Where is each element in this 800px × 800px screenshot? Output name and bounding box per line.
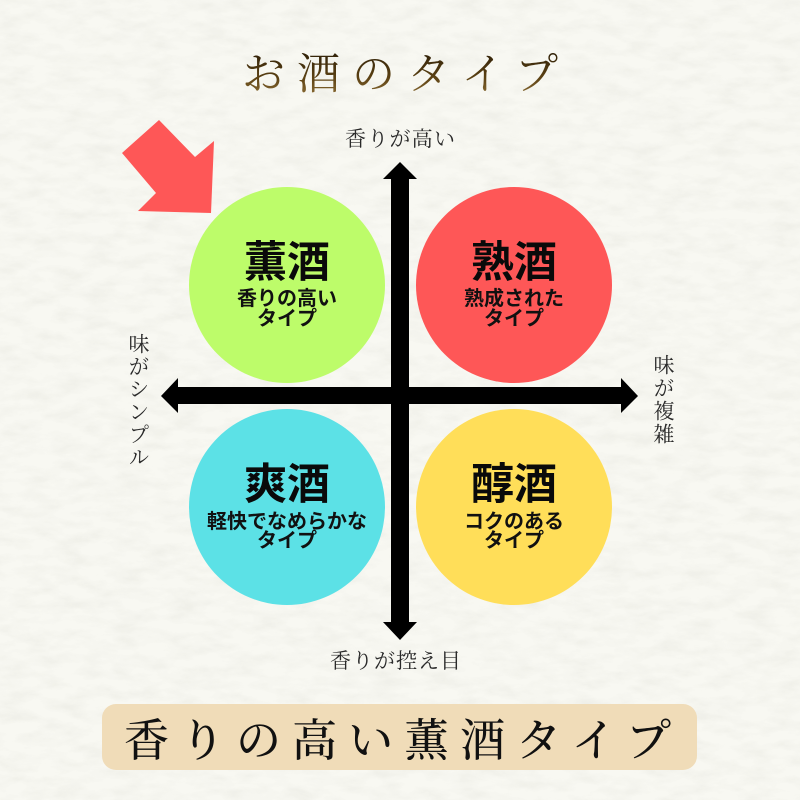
panel: 薫酒 circle xyxy=(189,187,385,383)
arrow: vertical axis xyxy=(383,162,417,640)
panel: 爽酒 circle: 軽快でなめらかな xyxy=(207,510,367,533)
panel: 薫酒 circle: タイプ xyxy=(257,307,317,330)
panel: 薫酒 circle: 薫酒 xyxy=(244,239,330,287)
arrow: red pointer to the top-left circle xyxy=(122,120,214,213)
panel: 醇酒 circle: タイプ xyxy=(484,529,544,552)
panel: 爽酒 circle xyxy=(189,409,385,605)
banner xyxy=(102,704,697,770)
axis label: left: 味がシンプル xyxy=(126,333,150,467)
panel: 醇酒 circle: コクのある xyxy=(464,510,564,533)
panel: 熟酒 circle: タイプ xyxy=(484,307,544,330)
panel: 爽酒 circle: 爽酒 xyxy=(244,461,330,509)
panel: 醇酒 circle: 醇酒 xyxy=(471,461,557,509)
title: お酒のタイプ xyxy=(242,52,558,99)
axis label: top: 香りが高い xyxy=(345,127,455,151)
panel: 熟酒 circle: 熟成された xyxy=(464,286,564,310)
panel: 爽酒 circle: タイプ xyxy=(257,529,317,552)
panel: 熟酒 circle xyxy=(416,187,612,383)
axis label: right: 味が複雑 xyxy=(651,354,675,444)
axis label: bottom: 香りが控え目 xyxy=(330,649,461,673)
panel: 熟酒 circle: 熟酒 xyxy=(471,239,557,287)
panel: 薫酒 circle: 香りの高い xyxy=(237,287,337,310)
banner: 香りの高い薫酒タイプ xyxy=(124,716,671,766)
panel: 醇酒 circle xyxy=(416,409,612,605)
arrow: horizontal axis xyxy=(161,378,638,413)
